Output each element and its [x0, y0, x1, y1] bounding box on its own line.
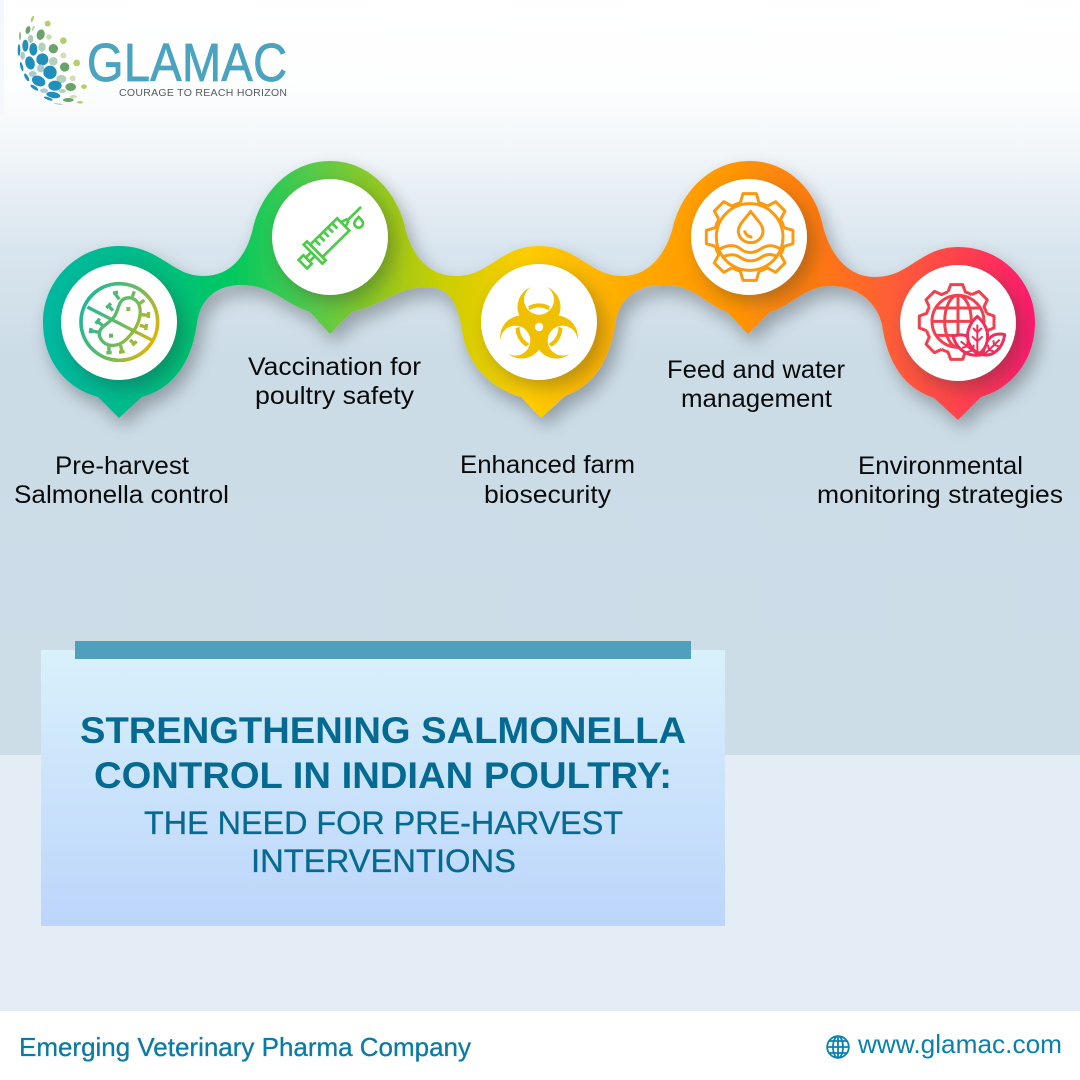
label: feed and water management: management	[681, 385, 832, 413]
label: feed and water management: Feed and water	[667, 356, 845, 384]
label: enhanced farm biosecurity	[460, 451, 635, 509]
footer strip	[0, 1011, 1080, 1080]
label: vaccination for poultry safety: Vaccination for	[248, 353, 421, 381]
title: bold lines	[80, 710, 686, 796]
title: subtitle lines	[144, 805, 623, 879]
background: left edge tint	[0, 0, 4, 115]
circle shadows inside the pins	[68, 187, 1023, 389]
pin 5: gear with globe and leaves icon	[900, 265, 1016, 381]
pin 2: syringe icon	[272, 179, 388, 295]
title: bold lines: STRENGTHENING SALMONELLA	[80, 710, 686, 751]
pin 1: no bacteria icon	[61, 264, 177, 380]
label: environmental monitoring strategies: monitoring strategies	[817, 481, 1063, 509]
title panel	[41, 641, 725, 926]
label: environmental monitoring strategies: Environmental	[858, 452, 1023, 480]
icon: globe	[827, 1036, 849, 1058]
label: enhanced farm biosecurity: Enhanced farm	[460, 451, 635, 479]
label: pre-harvest Salmonella control	[14, 452, 229, 509]
label: feed and water management	[667, 356, 845, 413]
logo: dot sphere	[18, 15, 87, 105]
label: pre-harvest Salmonella control: Pre-harvest	[55, 452, 189, 480]
title: subtitle lines: THE NEED FOR PRE-HARVEST	[144, 805, 623, 841]
logo: Glamac	[18, 15, 287, 105]
label: vaccination for poultry safety: poultry safety	[255, 382, 415, 410]
title accent bar	[75, 641, 691, 659]
logo: wordmark: GLAMAC	[87, 32, 287, 93]
pin 3: biohazard icon	[481, 264, 597, 380]
title panel background	[41, 650, 725, 926]
footer tagline: Emerging Veterinary Pharma Company	[19, 1032, 471, 1062]
label: enhanced farm biosecurity: biosecurity	[484, 481, 612, 509]
chain of five gradient pins	[43, 161, 1035, 420]
label: vaccination for poultry safety	[248, 353, 421, 410]
label: pre-harvest Salmonella control: Salmonella control	[14, 481, 229, 509]
background: lower band	[0, 755, 1080, 1011]
footer website: www.glamac.com	[857, 1029, 1062, 1059]
pin 4: gear with water drop icon	[691, 179, 807, 295]
background: upper gradient	[0, 0, 1080, 755]
logo: tagline: COURAGE TO REACH HORIZON	[119, 87, 287, 99]
title: subtitle lines: INTERVENTIONS	[251, 843, 516, 879]
title: bold lines: CONTROL IN INDIAN POULTRY:	[94, 755, 672, 796]
label: environmental monitoring strategies	[817, 452, 1063, 509]
